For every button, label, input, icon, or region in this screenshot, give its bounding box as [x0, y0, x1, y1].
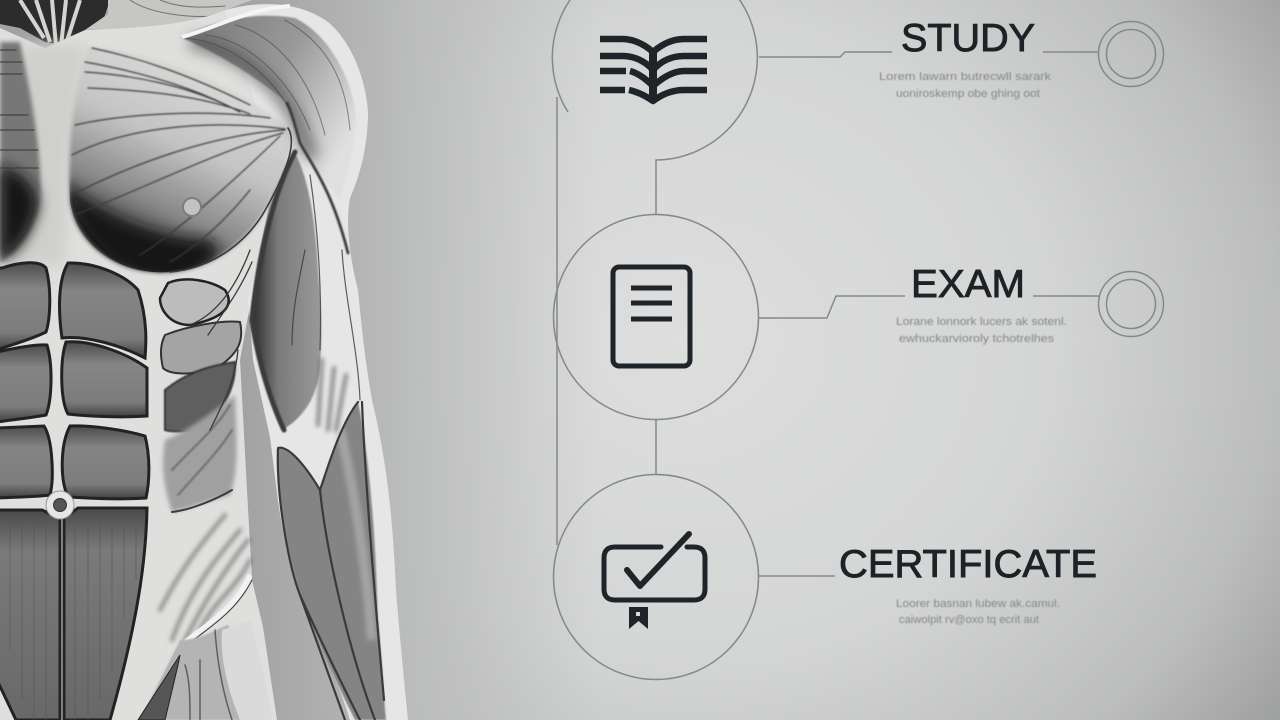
nipple	[183, 198, 201, 216]
certificate heading and description: Loorer basnan lubew ak.camul.	[896, 598, 1060, 610]
exam heading and description	[759, 263, 1099, 345]
abdominal panels	[0, 263, 149, 720]
icon: exam document	[613, 267, 690, 366]
study target ring	[1098, 22, 1164, 86]
navel ring	[46, 491, 74, 519]
exam heading and description: EXAM	[911, 263, 1025, 306]
icon: certificate with check	[604, 534, 705, 629]
icon: open book	[600, 39, 707, 101]
deltoid	[182, 6, 356, 253]
arm base	[225, 4, 408, 720]
study node circle and connector	[552, 0, 757, 545]
biceps	[250, 152, 360, 430]
right pectoral	[60, 47, 291, 280]
exam target ring	[1098, 272, 1164, 336]
torso base	[0, 5, 290, 720]
certificate heading and description: CERTIFICATE	[839, 543, 1097, 586]
exam node circle	[554, 214, 758, 420]
left pectoral	[0, 42, 41, 262]
study heading and description: STUDY	[901, 17, 1035, 60]
serratus and oblique muscles	[160, 250, 252, 652]
exam heading and description: Lorane lonnork lucers ak sotenl.	[896, 316, 1067, 328]
study heading and description: uoniroskemp obe ghing oot	[896, 88, 1040, 100]
certificate heading and description	[759, 543, 1097, 626]
anatomical muscle figure	[0, 0, 408, 720]
certificate heading and description: caiwolpit rv@oxo tq ecrit aut	[899, 614, 1039, 626]
thigh muscles	[138, 620, 272, 720]
study heading and description: Lorem lawarn butrecwll sarark	[879, 71, 1052, 83]
left spine connector	[556, 97, 558, 545]
exam heading and description: ewhuckarvioroly tchotrelhes	[899, 333, 1055, 345]
connector between exam and certificate	[655, 420, 657, 475]
study heading and description	[759, 17, 1098, 100]
certificate node circle	[554, 474, 758, 680]
sternum highlight	[10, 45, 88, 265]
forearm	[278, 402, 386, 720]
neck muscles	[0, 0, 252, 46]
